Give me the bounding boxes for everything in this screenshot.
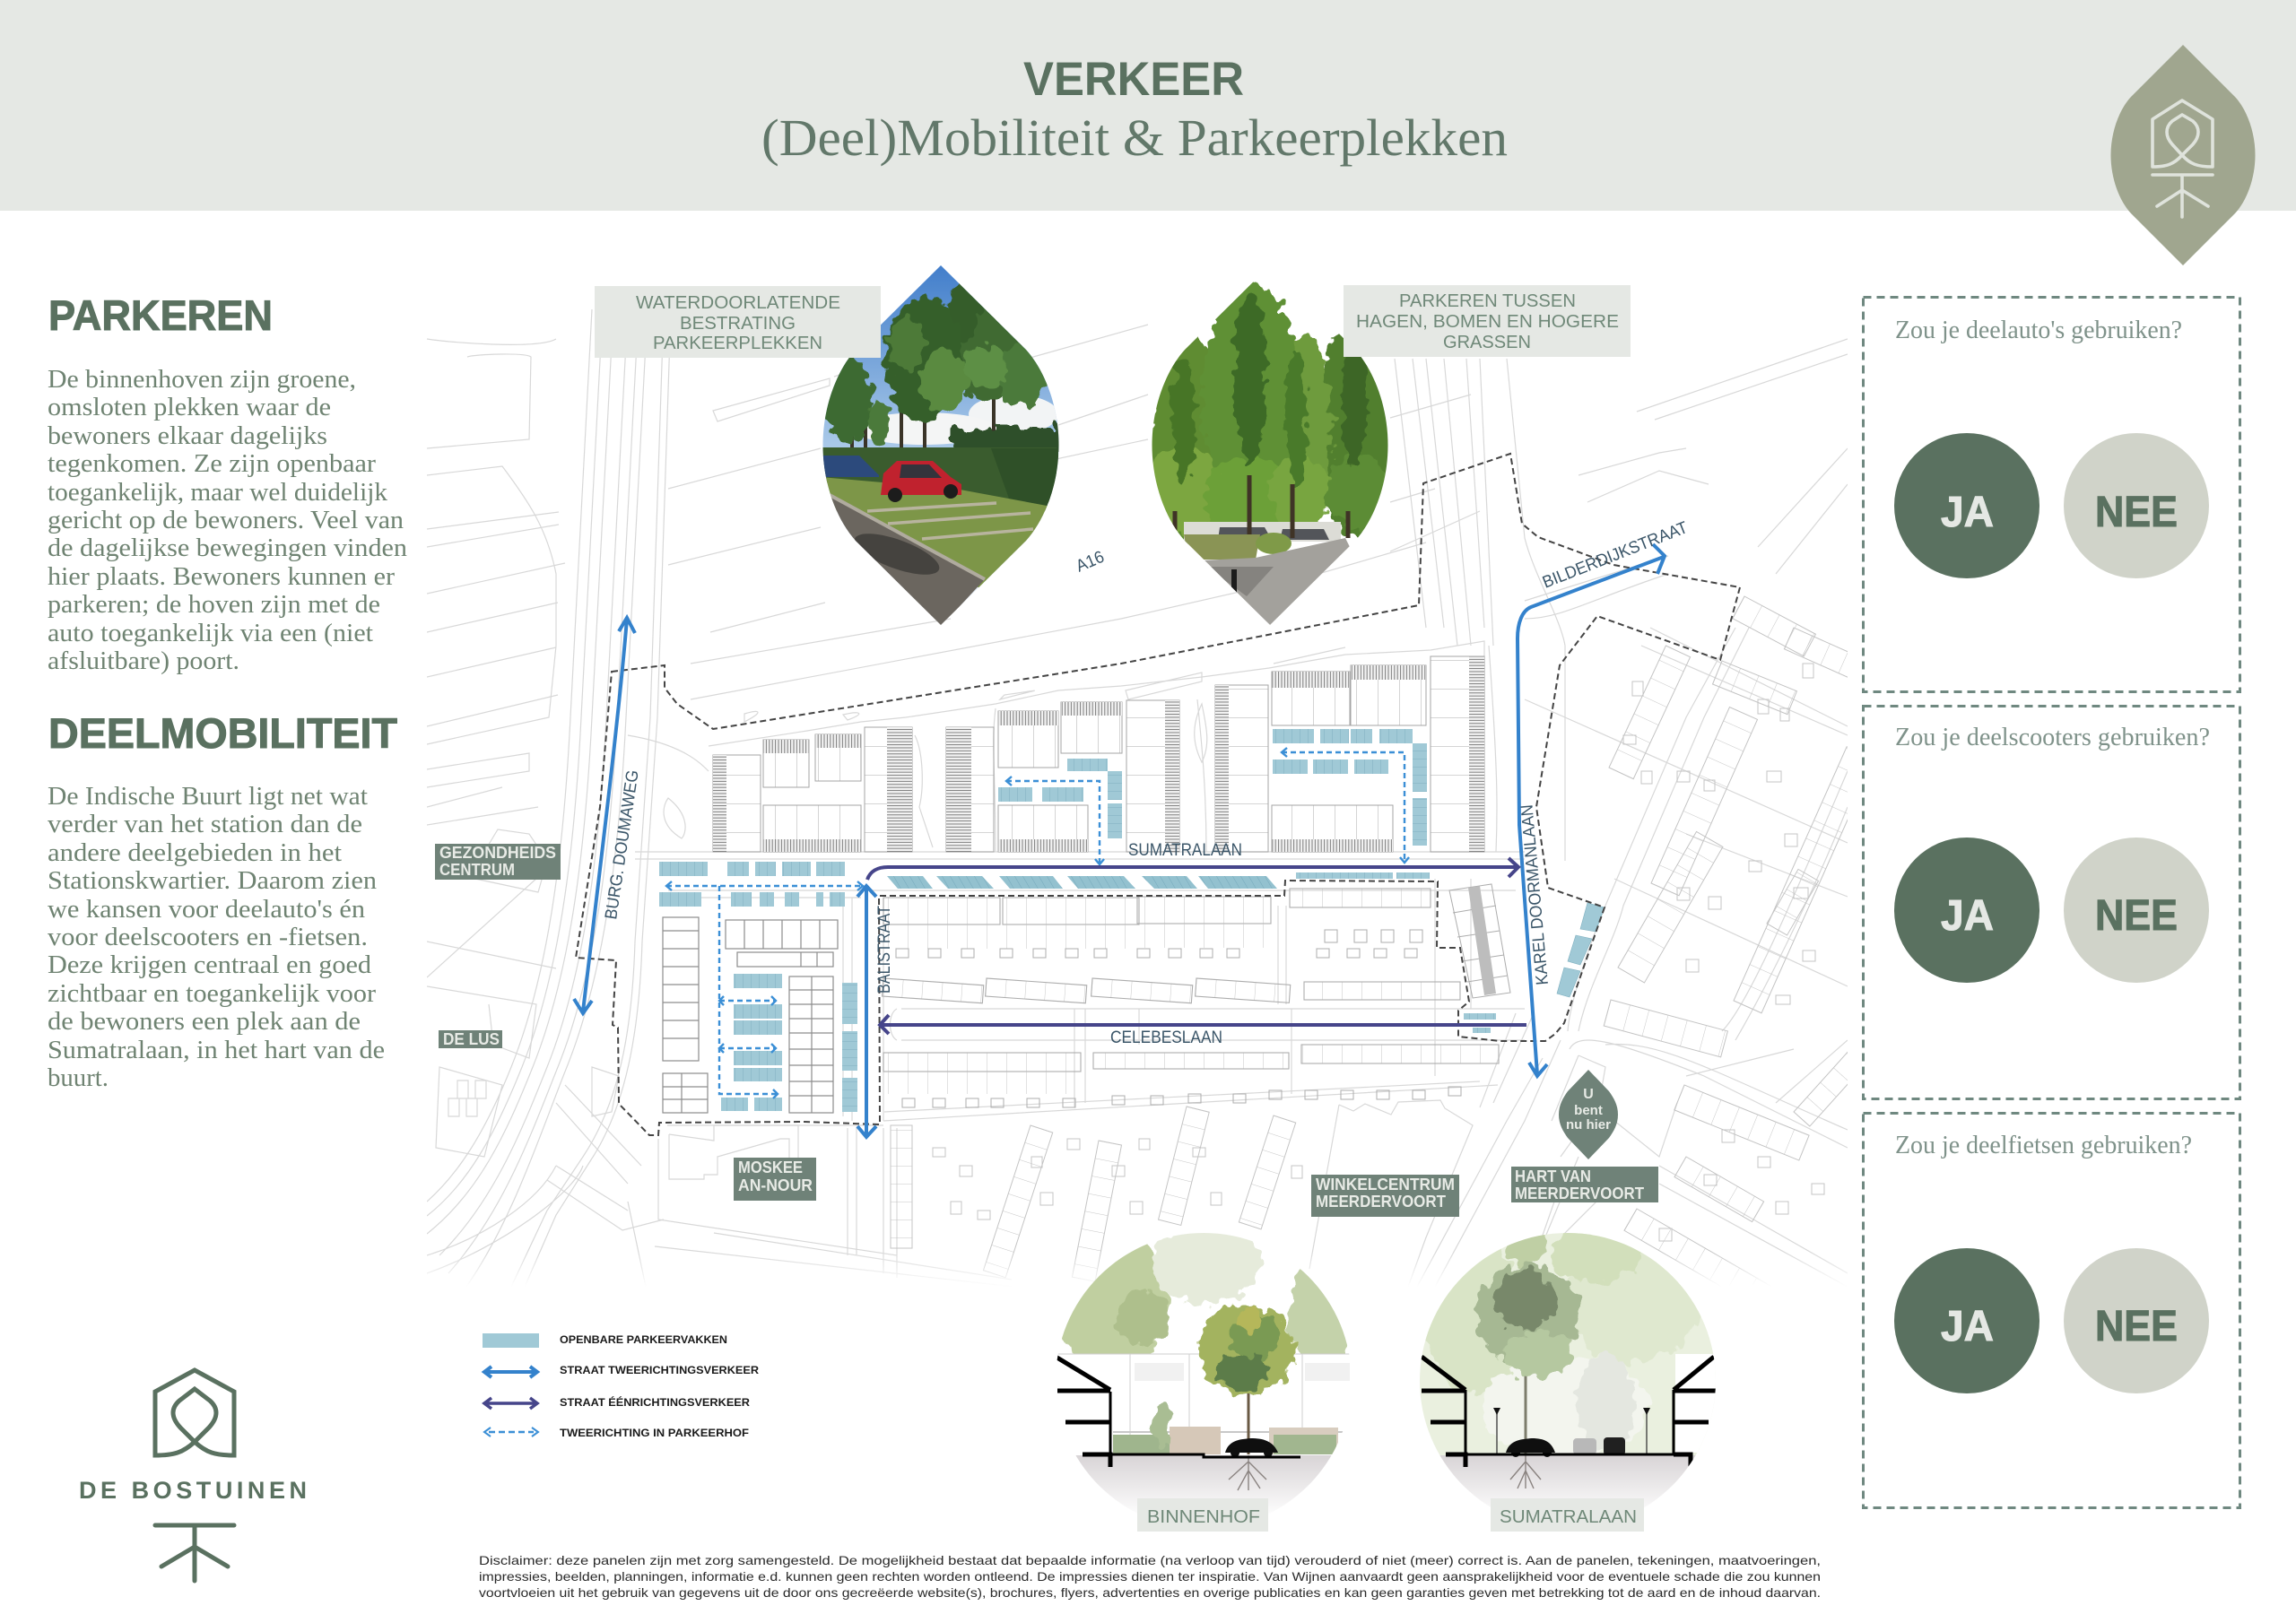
text block: deelmobiliteit: de bewoners een plek aan de — [48, 1008, 361, 1036]
neighbourhood sheds — [933, 664, 1824, 1241]
legend: TWEERICHTING IN PARKEERHOF — [560, 1427, 749, 1439]
text block: parkeren: De binnenhoven zijn groene, — [48, 366, 356, 394]
caption: waterdoorlatende bestrating — [595, 286, 881, 358]
title — [761, 53, 1508, 167]
label: de lus: DE LUS — [443, 1030, 500, 1048]
label: moskee an-nour — [734, 1158, 816, 1201]
map: site plan — [427, 309, 1892, 1320]
text block: deelmobiliteit: buurt. — [48, 1064, 109, 1092]
panel: deelscooter poll: NEE — [2095, 892, 2178, 940]
text block: deelmobiliteit: Stationskwartier. Daarom zien — [48, 867, 377, 895]
street labels: CELEBESLAAN — [1110, 1028, 1222, 1047]
panel: deelfiets poll: JA — [1941, 1303, 1994, 1350]
section drawing: sumatralaan — [1420, 1233, 1716, 1506]
logo: de bostuinen — [79, 1370, 307, 1581]
disclaimer: impressies, beelden, planningen, informatie e.d. kunnen geen rechten worden ontleend. De impressies dienen ter inspiratie. Van Wijnen aanvaardt geen aansprakelijkheid voor de eventuele schade die zou kunnen — [479, 1569, 1821, 1584]
marker: u bent nu hier: U — [1583, 1087, 1594, 1102]
terrace rows — [883, 889, 1499, 1072]
stippled corner block — [1449, 884, 1510, 998]
arrow: one-way streets — [867, 858, 1526, 1034]
text block: parkeren — [48, 366, 407, 675]
panel: deelfiets poll: NEE — [2095, 1303, 2178, 1350]
street labels: KAREL DOORMANLAAN — [1518, 803, 1552, 985]
housing blocks south — [663, 917, 838, 1113]
legend: OPENBARE PARKEERVAKKEN — [560, 1333, 727, 1346]
caption: waterdoorlatende bestrating: WATERDOORLATENDE — [636, 293, 840, 313]
panel: deelscooter poll: JA — [1941, 892, 1994, 940]
A16 corridor — [427, 512, 565, 726]
caption: parkeren tussen hagen: GRASSEN — [1443, 333, 1531, 352]
label: hart van meerdervoort: MEERDERVOORT — [1515, 1185, 1644, 1202]
neighbourhood base lines — [427, 309, 1848, 1291]
photo: hedges and trees leaf — [1152, 282, 1388, 625]
text block: parkeren: hier plaats. Bewoners kunnen er — [48, 563, 396, 591]
label: gezondheidscentrum — [435, 844, 561, 880]
panel: deelauto poll — [1864, 298, 2240, 692]
text block: parkeren: omsloten plekken waar de — [48, 394, 331, 421]
text block: deelmobiliteit: Sumatralaan, in het hart van de — [48, 1037, 385, 1064]
panel: deelscooter poll: Zou je deelscooters gebruiken? — [1895, 724, 2210, 751]
arrow: two-way streets — [574, 544, 1665, 1137]
caption: waterdoorlatende bestrating: BESTRATING — [680, 314, 796, 334]
panel: deelauto poll: JA — [1941, 489, 1994, 536]
icon: header leaf logo — [2111, 45, 2255, 265]
parking: public parking bays — [659, 729, 1496, 1111]
header band — [0, 0, 2296, 211]
legend: STRAAT ÉÉNRICHTINGSVERKEER — [560, 1395, 750, 1409]
text block: deelmobiliteit: we kansen voor deelauto's én — [48, 896, 365, 924]
garden sheds — [896, 930, 1461, 1107]
title: VERKEER — [1023, 53, 1244, 106]
text block: deelmobiliteit: andere deelgebieden in het — [48, 839, 342, 867]
street labels: BILDERDIJKSTRAAT — [1540, 518, 1691, 593]
disclaimer — [479, 1553, 1821, 1600]
street labels — [602, 518, 1691, 1047]
caption: waterdoorlatende bestrating: PARKEERPLEKKEN — [653, 334, 822, 353]
panel: deelfiets poll — [1864, 1114, 2240, 1508]
section label: binnenhof: BINNENHOF — [1147, 1507, 1260, 1527]
hatched roofs — [713, 656, 1484, 852]
label: winkelcentrum meerdervoort — [1311, 1175, 1459, 1217]
caption: parkeren tussen hagen: PARKEREN TUSSEN — [1399, 291, 1576, 311]
text block: parkeren: parkeren; de hoven zijn met de — [48, 591, 380, 619]
west blocks — [427, 339, 556, 977]
section label: sumatralaan: SUMATRALAAN — [1500, 1507, 1637, 1527]
text block: deelmobiliteit — [48, 783, 385, 1092]
street labels: SUMATRALAAN — [1128, 841, 1242, 860]
street labels: BURG. DOUMAWEG — [602, 768, 643, 921]
photo: permeable parking leaf — [816, 260, 1063, 628]
marker: u bent nu hier — [1559, 1070, 1618, 1159]
text block: deelmobiliteit: verder van het station dan de — [48, 811, 362, 838]
disclaimer: Disclaimer: deze panelen zijn met zorg samengesteld. De mogelijkheid bestaat dat bepaalde informatie (na verloop van tijd) verouderd of niet (meer) correct is. Aan de panelen, tekeningen, maatvoeringen, — [479, 1553, 1821, 1567]
label: gezondheidscentrum: CENTRUM — [439, 861, 515, 879]
text block: parkeren: tegenkomen. Ze zijn openbaar — [48, 450, 377, 478]
heading: parkeren: PARKEREN — [48, 291, 273, 339]
winkelcentrum — [1309, 1100, 1473, 1287]
text block: parkeren: de dagelijkse bewegingen vinden — [48, 534, 407, 562]
rear garden parcels — [883, 924, 1271, 1094]
caption: parkeren tussen hagen — [1344, 285, 1631, 357]
label: moskee an-nour: MOSKEE — [738, 1159, 803, 1176]
label: gezondheidscentrum: GEZONDHEIDS — [439, 844, 556, 862]
heading: deelmobiliteit: DEELMOBILITEIT — [48, 709, 397, 757]
text block: parkeren: afsluitbare) poort. — [48, 647, 239, 675]
label: hart van meerdervoort — [1511, 1167, 1658, 1202]
text block: parkeren: toegankelijk, maar wel duidelijk — [48, 479, 387, 507]
logo: de bostuinen: DE BOSTUINEN — [79, 1477, 307, 1504]
text block: parkeren: bewoners elkaar dagelijks — [48, 422, 327, 450]
street labels: A16 — [1074, 548, 1107, 577]
label: winkelcentrum meerdervoort: MEERDERVOORT — [1316, 1193, 1446, 1211]
panel: deelauto poll: Zou je deelauto's gebruiken? — [1895, 317, 2182, 344]
label: winkelcentrum meerdervoort: WINKELCENTRUM — [1316, 1176, 1455, 1193]
text block: deelmobiliteit: De Indische Buurt ligt net wat — [48, 783, 368, 811]
panel: deelscooter poll — [1864, 707, 2240, 1099]
panel: deelfiets poll: Zou je deelfietsen gebruiken? — [1895, 1132, 2192, 1159]
panel: deelauto poll: NEE — [2095, 489, 2178, 536]
text block: deelmobiliteit: voor deelscooters en -fietsen. — [48, 924, 368, 951]
section label: sumatralaan — [1491, 1498, 1644, 1532]
legend — [483, 1333, 759, 1439]
label: moskee an-nour: AN-NOUR — [738, 1176, 813, 1194]
title: (Deel)Mobiliteit & Parkeerplekken — [761, 108, 1508, 167]
label: hart van meerdervoort: HART VAN — [1515, 1167, 1591, 1185]
arrow: dashed parking court routes — [666, 748, 1409, 1098]
street labels: BALISTRAAT — [875, 906, 894, 994]
text block: deelmobiliteit: Deze krijgen centraal en goed — [48, 951, 371, 979]
moskee — [669, 1125, 798, 1179]
site plan street lines — [628, 641, 1525, 1125]
hart van meerdervoort — [1543, 1055, 1677, 1236]
text block: deelmobiliteit: zichtbaar en toegankelijk voor — [48, 980, 377, 1008]
text block: parkeren: auto toegankelijk via een (niet — [48, 620, 373, 647]
neighbourhood house rows — [1604, 595, 1848, 1282]
housing blocks north — [763, 665, 1426, 852]
section label: binnenhof — [1137, 1498, 1268, 1532]
legend: STRAAT TWEERICHTINGSVERKEER — [560, 1364, 759, 1376]
marker: u bent nu hier: nu hier — [1566, 1117, 1611, 1133]
caption: parkeren tussen hagen: HAGEN, BOMEN EN HOGERE — [1356, 312, 1619, 332]
text block: parkeren: gericht op de bewoners. Veel van — [48, 507, 404, 534]
marker: u bent nu hier: bent — [1574, 1103, 1603, 1118]
section drawing: binnenhof — [1057, 1233, 1350, 1506]
east roads — [1525, 628, 1848, 1148]
disclaimer: voortvloeien uit het gebruik van gegevens uit de door ons gecreëerde website(s), brochures, flyers, advertenties en overige publicaties en kan geen garanties geven met betrekking tot de aard en de inhoud daarvan. — [479, 1585, 1821, 1600]
project boundary dashed — [576, 454, 1740, 1135]
